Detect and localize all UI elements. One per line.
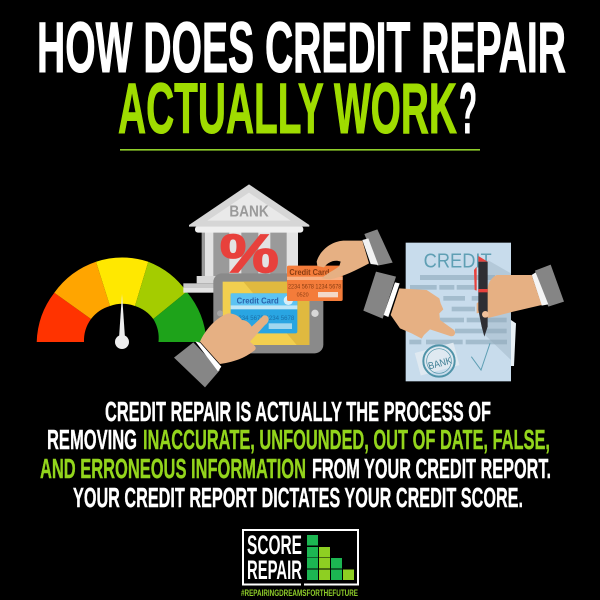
illustration: tablet with credit card bbox=[213, 273, 323, 353]
illustration: credit document bbox=[406, 243, 516, 381]
logo: Score Repair: #REPAIRINGDREAMSFORTHEFUTURE bbox=[241, 588, 358, 599]
illustration: orange credit card with hand: 0520 bbox=[297, 293, 309, 299]
illustration: tablet with credit card: Credit Card bbox=[237, 296, 279, 306]
illustration: orange credit card with hand: 2234 5678 1234 5678 bbox=[288, 284, 342, 291]
illustration: hand tapping tablet bbox=[174, 313, 269, 387]
illustration: hand holding pen bbox=[474, 256, 564, 337]
logo: Score Repair bbox=[241, 530, 358, 599]
logo: Score Repair: SCORE bbox=[247, 530, 302, 560]
title bbox=[37, 9, 566, 149]
illustration: credit document: CREDIT bbox=[424, 249, 492, 272]
title: ? bbox=[459, 70, 477, 149]
illustration: credit score gauge bbox=[37, 258, 207, 349]
body line 3: AND ERRONEOUS INFORMATION bbox=[40, 453, 306, 484]
illustration: hand pointing at document bbox=[363, 272, 455, 339]
illustration: bank building: % bbox=[220, 225, 279, 284]
illustration: bank building: BANK bbox=[229, 204, 269, 221]
illustration: orange credit card with hand bbox=[287, 229, 393, 301]
body line 2: REMOVING bbox=[47, 424, 137, 455]
illustration: orange credit card with hand: Credit Card bbox=[289, 268, 329, 277]
illustration: tablet with credit card: 1234 5678 1234 5678 bbox=[235, 316, 295, 322]
illustration: credit document: BANK bbox=[427, 355, 453, 372]
logo: Score Repair: REPAIR bbox=[247, 555, 302, 585]
body text bbox=[40, 396, 551, 513]
illustration: bank building bbox=[183, 184, 310, 293]
